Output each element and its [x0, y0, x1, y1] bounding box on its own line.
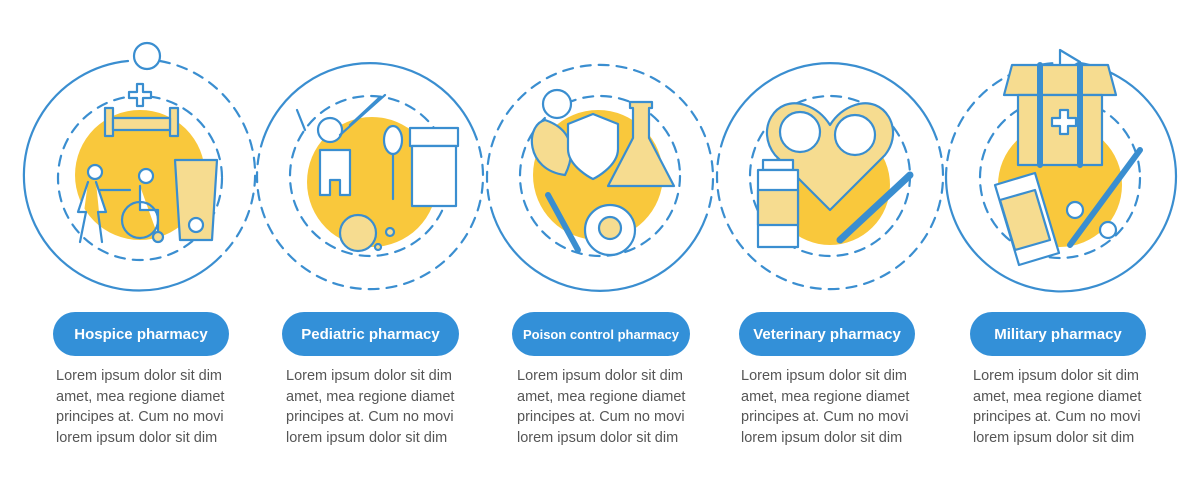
text: veterinary: Lorem ipsum dolor sit dim	[741, 368, 907, 384]
text: hospice: lorem ipsum dolor sit dim	[56, 430, 217, 446]
icon: hospice	[78, 84, 217, 242]
diagram: circles and icons	[22, 42, 1178, 292]
text: pediatric: amet, mea regione diamet	[286, 388, 454, 404]
pill: poison control	[512, 312, 690, 356]
circle 4 rings	[717, 63, 943, 289]
text: pediatric: principes at. Cum no movi	[286, 409, 454, 425]
icon: poison	[532, 90, 674, 255]
text: poison: principes at. Cum no movi	[517, 409, 685, 425]
text: hospice: amet, mea regione diamet	[56, 388, 224, 404]
text: military: lorem ipsum dolor sit dim	[973, 430, 1134, 446]
pill: military	[970, 312, 1146, 356]
circle 3 rings	[487, 65, 713, 291]
text: military	[973, 368, 1142, 446]
pill: veterinary	[739, 312, 915, 356]
text: pediatric: Lorem ipsum dolor sit dim	[286, 368, 452, 384]
icon: military	[995, 65, 1140, 265]
text: veterinary: lorem ipsum dolor sit dim	[741, 430, 902, 446]
text: poison	[517, 368, 686, 446]
circle 1 rings	[24, 43, 255, 290]
circle 5 rings	[946, 50, 1176, 291]
text: military: principes at. Cum no movi	[973, 409, 1141, 425]
text: military: amet, mea regione diamet	[973, 388, 1141, 404]
text: pediatric: lorem ipsum dolor sit dim	[286, 430, 447, 446]
text: military: Lorem ipsum dolor sit dim	[973, 368, 1139, 384]
pill: pediatric	[282, 312, 459, 356]
text: pediatric	[286, 368, 454, 446]
yellow blobs	[75, 110, 1122, 247]
text: poison: amet, mea regione diamet	[517, 388, 685, 404]
pill: pediatric: Pediatric pharmacy	[301, 326, 440, 342]
text: hospice	[56, 368, 224, 446]
text: hospice: Lorem ipsum dolor sit dim	[56, 368, 222, 384]
text: poison: lorem ipsum dolor sit dim	[517, 430, 678, 446]
pill: poison control: Poison control pharmacy	[523, 326, 679, 342]
circle 2 rings	[257, 63, 483, 289]
text: veterinary: principes at. Cum no movi	[741, 409, 909, 425]
text: veterinary: amet, mea regione diamet	[741, 388, 909, 404]
text: hospice: principes at. Cum no movi	[56, 409, 224, 425]
pill: hospice: Hospice pharmacy	[74, 326, 208, 342]
pill: veterinary: Veterinary pharmacy	[753, 326, 901, 342]
icon: pediatric	[297, 95, 458, 251]
text: poison: Lorem ipsum dolor sit dim	[517, 368, 683, 384]
pill: military: Military pharmacy	[994, 326, 1122, 342]
icon: veterinary	[758, 103, 910, 247]
text: veterinary	[741, 368, 910, 446]
pill: hospice	[53, 312, 229, 356]
